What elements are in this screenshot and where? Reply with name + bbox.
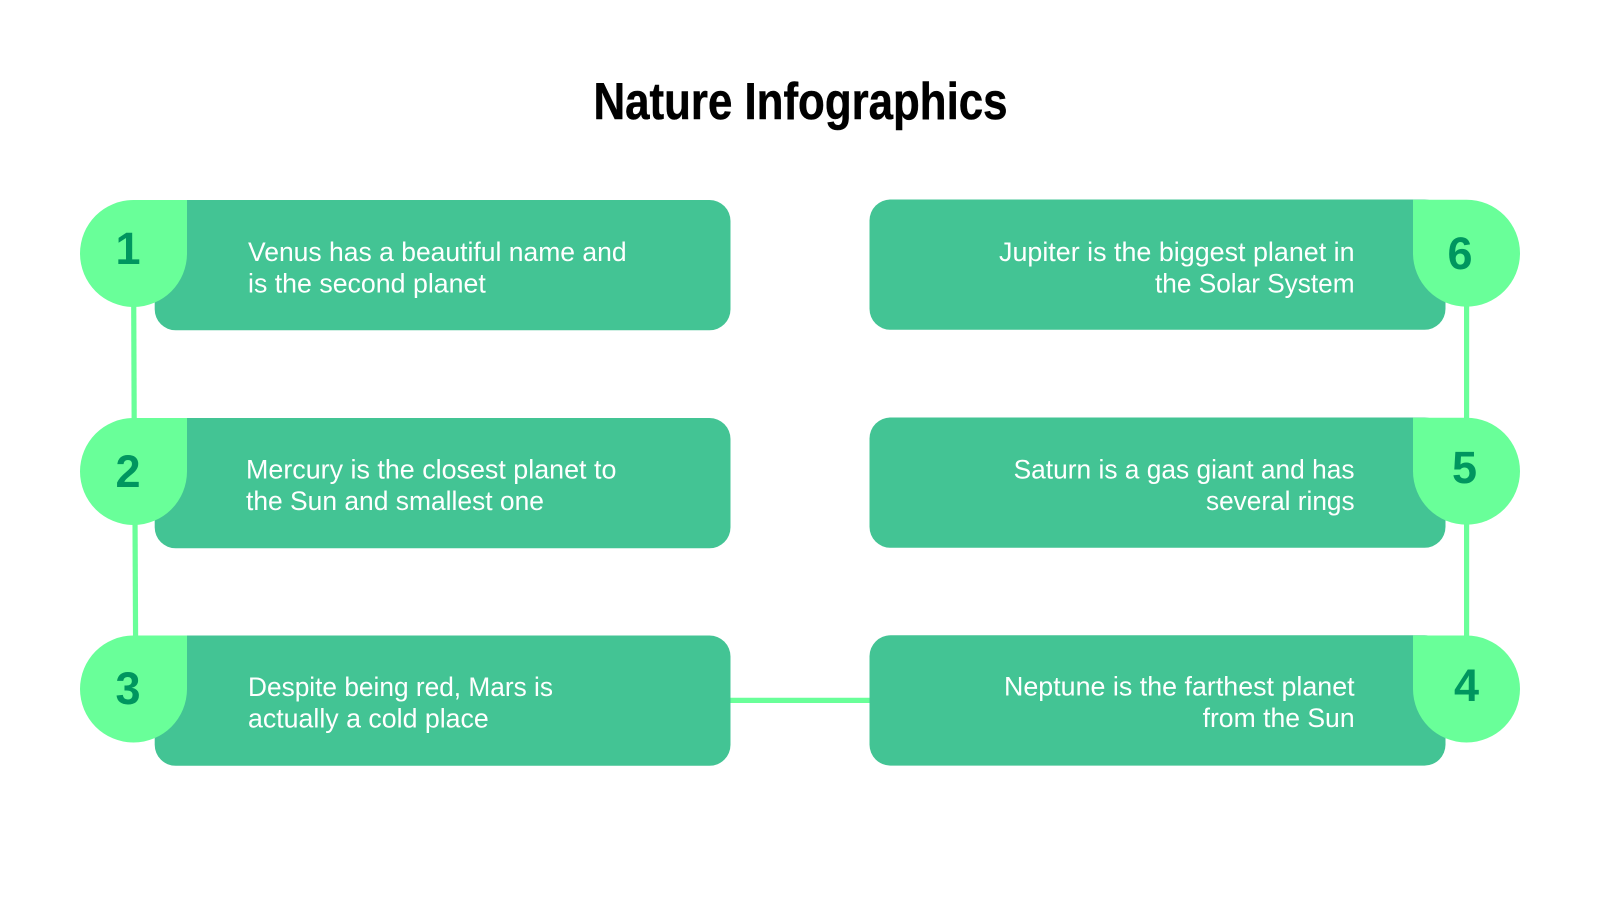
panel: step 3 (80, 636, 730, 766)
panel: step 4: from the Sun (1203, 703, 1355, 733)
connector: steps 2 to 3 (132, 515, 138, 642)
panel: step 3: 3 (115, 663, 141, 714)
panel: step 2 (80, 418, 730, 548)
panel: step 5: 5 (1452, 442, 1477, 493)
panel: step 4: 4 (1454, 660, 1479, 711)
panel: step 4 (870, 635, 1520, 766)
panel: step 3: actually a cold place (248, 704, 489, 734)
panel: step 5 (870, 418, 1520, 548)
title: Nature Infographics (594, 73, 1008, 131)
panel: step 4: Neptune is the farthest planet (1004, 671, 1355, 701)
panel: step 6: the Solar System (1155, 269, 1355, 299)
connector: steps 5 to 6 (1464, 300, 1469, 425)
panel: step 2: Mercury is the closest planet to (246, 454, 616, 484)
panel: step 1: Venus has a beautiful name and (248, 237, 627, 267)
panel: step 2: 2 (115, 446, 141, 497)
connector: steps 1 to 2 (131, 300, 137, 425)
panel: step 5: Saturn is a gas giant and has (1014, 454, 1355, 484)
panel: step 1: is the second planet (248, 269, 486, 299)
panel: step 1 (80, 200, 730, 330)
connector: steps 4 to 5 (1464, 515, 1469, 642)
panel: step 1: 1 (115, 223, 141, 274)
panel: step 6 (870, 200, 1520, 330)
connector: steps 3 to 4 (725, 698, 875, 703)
panel: step 6: Jupiter is the biggest planet in (999, 237, 1355, 267)
panel: step 2: the Sun and smallest one (246, 486, 544, 516)
panel: step 5: several rings (1206, 486, 1355, 516)
panel: step 3: Despite being red, Mars is (248, 672, 553, 702)
panel: step 6: 6 (1447, 228, 1473, 279)
